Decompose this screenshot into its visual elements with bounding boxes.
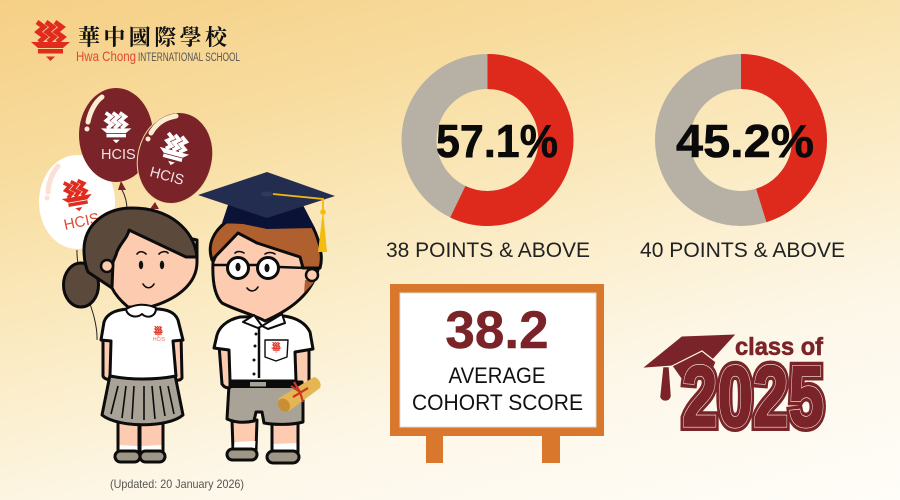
badge text: 2025: 2025 xyxy=(682,349,824,445)
icon: blouse crest xyxy=(153,326,164,337)
shirt buttons xyxy=(252,332,258,376)
illustration: balloons xyxy=(39,88,223,340)
badge: class of 2025 xyxy=(645,333,824,445)
value label: 57.1% xyxy=(436,115,558,167)
eyebrows and mouth xyxy=(137,252,168,288)
donut label: 40 points: 40 POINTS & ABOVE xyxy=(640,239,845,262)
board legs xyxy=(426,436,560,463)
illustration: boy student xyxy=(210,222,321,463)
shoes xyxy=(227,449,299,463)
eyes xyxy=(139,261,164,269)
icon: diploma scroll xyxy=(275,377,321,414)
school name in English: grey part: INTERNATIONAL SCHOOL xyxy=(138,52,240,64)
pocket with crest xyxy=(265,340,288,361)
arms xyxy=(103,335,182,380)
badge text: 2025: 2025 xyxy=(682,349,824,445)
blouse collar xyxy=(126,305,156,317)
donut chart: 45.2% xyxy=(672,72,814,208)
face xyxy=(213,225,320,321)
balloon: white HCIS: HCIS xyxy=(62,210,101,234)
skirt xyxy=(102,375,183,425)
illustration: girl student xyxy=(64,208,197,462)
ear xyxy=(306,269,318,281)
icon: school flame emblem xyxy=(31,22,70,61)
blouse xyxy=(101,309,183,379)
legs and socks xyxy=(118,420,163,453)
badge cap xyxy=(645,335,734,400)
badge text: class of: class of xyxy=(735,333,824,361)
average score label: AVERAGE xyxy=(448,363,546,388)
face xyxy=(110,225,197,307)
shirt collar xyxy=(243,314,285,329)
balloon: white HCIS xyxy=(39,155,115,249)
glasses xyxy=(213,258,306,278)
legs and socks xyxy=(232,420,298,452)
panel: wooden signboard xyxy=(390,284,604,463)
donut chart: 57.1% xyxy=(419,72,558,208)
shirt xyxy=(214,316,313,381)
blouse: HCIS xyxy=(153,337,166,343)
badge text: 2025: 2025 xyxy=(682,349,824,445)
school name in Chinese: 華中國際學校 xyxy=(78,25,229,50)
average score value: 38.2 xyxy=(445,301,549,360)
belt xyxy=(230,382,302,386)
board face xyxy=(400,293,596,427)
ear xyxy=(101,260,113,272)
logo: Hwa Chong International School xyxy=(31,22,240,64)
hair bun xyxy=(64,263,98,307)
value label: 45.2% xyxy=(676,115,814,167)
balloon: dark red front: HCIS xyxy=(148,164,186,189)
donut label: 38 points: 38 POINTS & ABOVE xyxy=(386,239,590,262)
shoes xyxy=(115,451,165,462)
hair xyxy=(84,208,197,288)
average score label line two: COHORT SCORE xyxy=(412,390,583,415)
illustration: graduation cap xyxy=(198,172,335,252)
balloon: dark red back: HCIS xyxy=(101,147,136,163)
school name in English: red part: Hwa Chong xyxy=(76,48,136,64)
sideburn xyxy=(304,280,316,293)
arms xyxy=(219,345,309,392)
hair xyxy=(210,222,321,268)
tassel xyxy=(273,194,323,214)
eyebrows and mouth xyxy=(235,252,275,291)
shorts xyxy=(227,385,303,424)
footnote: update date: (Updated: 20 January 2026) xyxy=(110,477,244,491)
board frame xyxy=(390,284,604,436)
balloon: dark red front xyxy=(127,104,223,212)
balloon: dark red back xyxy=(79,88,153,190)
